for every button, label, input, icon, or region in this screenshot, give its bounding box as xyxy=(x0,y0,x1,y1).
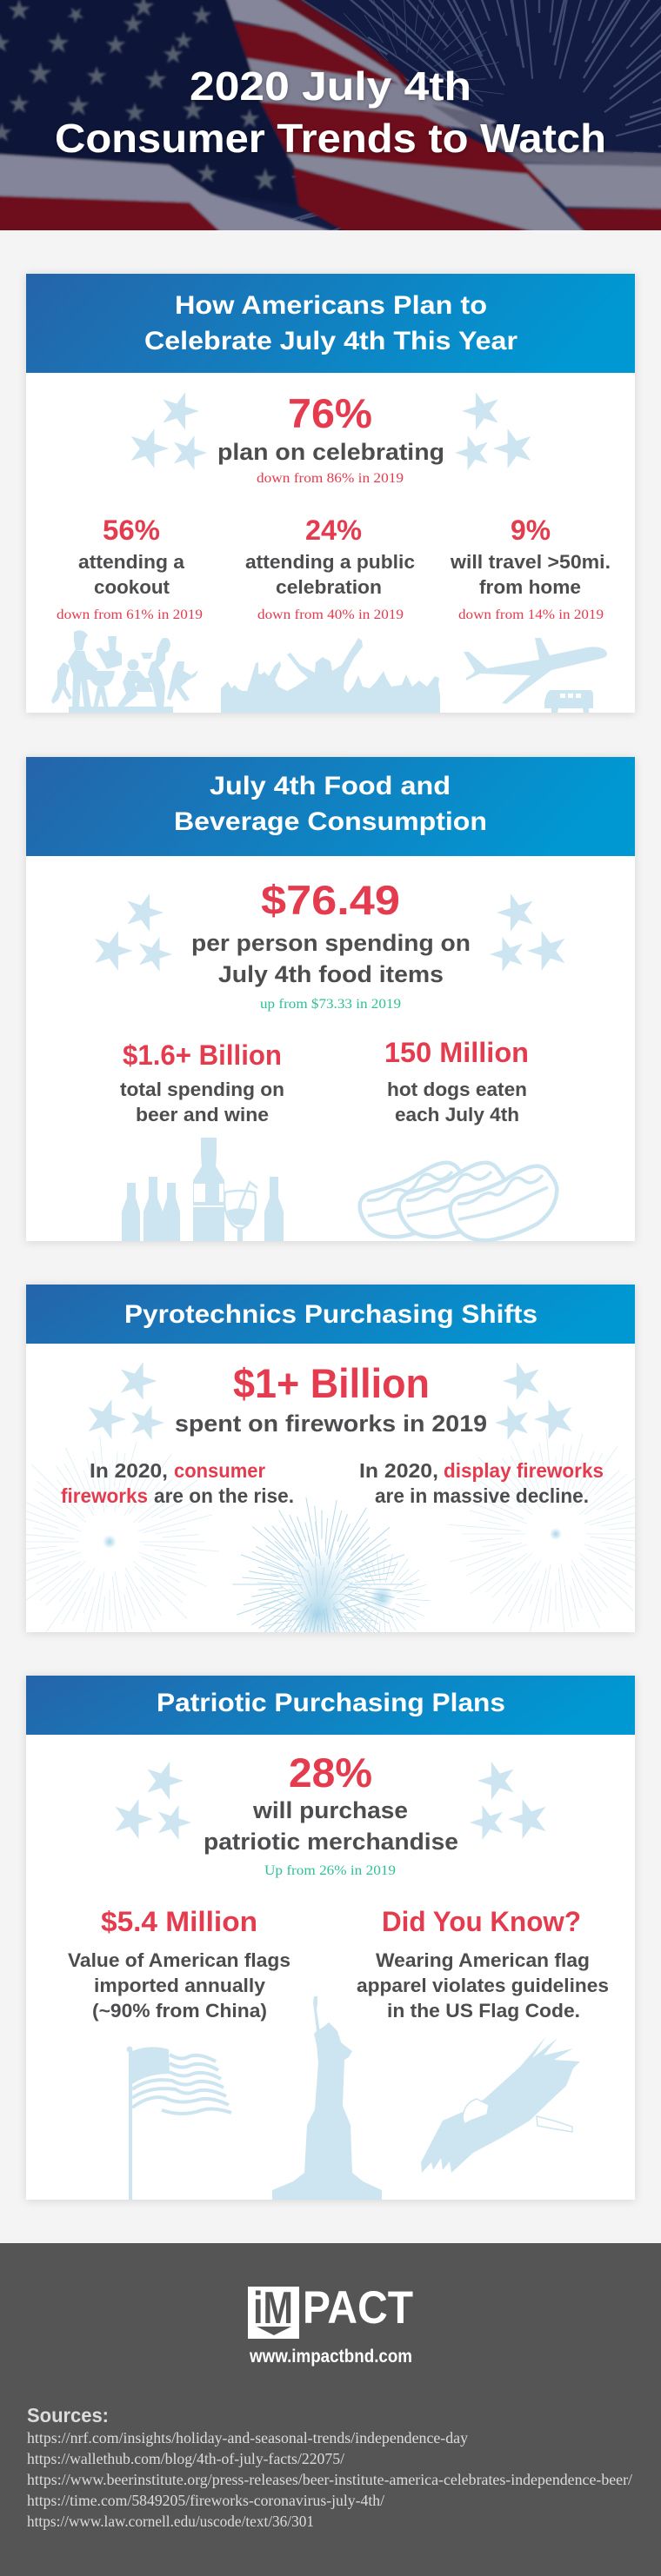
stat: hot dogs: 150 Million xyxy=(384,1037,529,1068)
sources heading: Sources: xyxy=(27,2404,109,2427)
text: display fireworks: are in massive decline. xyxy=(375,1484,589,1507)
panel card xyxy=(26,1676,635,2200)
stat: travel: down from 14% in 2019 xyxy=(458,607,604,622)
section header: How Americans Plan to xyxy=(175,291,487,320)
main stat: 76% xyxy=(217,390,444,486)
main stat: 76%: plan on celebrating xyxy=(217,439,444,465)
fact: did you know xyxy=(357,1906,609,2022)
decorative stars left xyxy=(88,887,176,973)
stat: public celebration: celebration xyxy=(276,576,382,598)
icon: bottles and glass xyxy=(122,1138,284,1241)
panel: patriotic purchasing xyxy=(26,1676,635,2200)
icon: Statue of Liberty xyxy=(272,1996,382,2200)
main stat: $1+ Billion: spent on fireworks in 2019 xyxy=(175,1411,487,1437)
stat: cookout: down from 61% in 2019 xyxy=(57,607,203,622)
main stat: 28%: Up from 26% in 2019 xyxy=(264,1863,396,1878)
stat: beer and wine: beer and wine xyxy=(136,1104,269,1125)
panel: how Americans plan to celebrate xyxy=(26,274,635,713)
panel card xyxy=(26,1285,635,1632)
panel card xyxy=(26,274,635,713)
panel card xyxy=(26,757,635,1241)
stat: cookout: cookout xyxy=(94,576,170,598)
icon: cookout silhouettes xyxy=(51,630,198,713)
title xyxy=(55,63,606,161)
stat: flag imports: imported annually xyxy=(94,1975,266,1996)
fact: did you know: apparel violates guidelines xyxy=(357,1975,609,1996)
main stat: 76%: down from 86% in 2019 xyxy=(257,471,404,486)
stat: beer and wine xyxy=(120,1039,284,1125)
decorative stars left xyxy=(124,386,210,472)
stat: hot dogs xyxy=(384,1037,529,1125)
logo: IMPACT xyxy=(248,2282,413,2339)
decorative stars left xyxy=(108,1756,195,1842)
decorative stars right xyxy=(451,386,538,472)
main stat: $76.49: up from $73.33 in 2019 xyxy=(260,997,401,1012)
section header: Patriotic Purchasing Plans xyxy=(157,1689,505,1717)
icon: bald eagle xyxy=(421,2036,580,2173)
sources list: https://www.beerinstitute.org/press-releases/beer-institute-america-celebrates-independence-beer/ xyxy=(27,2471,632,2488)
icon: American flag on pole xyxy=(127,2046,231,2200)
footer background xyxy=(0,2243,661,2576)
main stat: $76.49 xyxy=(191,877,471,1012)
stat: public celebration: attending a public xyxy=(245,551,415,573)
stat: cookout: 56% xyxy=(103,515,160,546)
main stat: $1+ Billion xyxy=(175,1360,487,1437)
fireworks illustration xyxy=(26,1427,635,1632)
stat: hot dogs: hot dogs eaten xyxy=(387,1079,527,1100)
section header xyxy=(26,757,635,856)
stat: cookout xyxy=(57,515,203,622)
main stat: $76.49: $76.49 xyxy=(261,877,400,923)
main stat: 28% xyxy=(204,1749,458,1878)
text: display fireworks: In 2020, xyxy=(359,1459,438,1482)
text: consumer fireworks: are on the rise. xyxy=(154,1484,294,1507)
main stat: 28%: 28% xyxy=(289,1749,372,1796)
main stat: 28%: patriotic merchandise xyxy=(204,1829,458,1855)
section header xyxy=(26,274,635,373)
icon: van xyxy=(544,690,593,713)
text: display fireworks xyxy=(359,1459,604,1507)
stat: public celebration xyxy=(245,515,415,622)
decorative stars right xyxy=(466,1756,553,1842)
section header xyxy=(26,1676,635,1735)
main stat: $76.49: July 4th food items xyxy=(218,961,444,987)
decorative stars right xyxy=(491,1356,579,1442)
stat: hot dogs: each July 4th xyxy=(395,1104,519,1125)
icon: hot dogs xyxy=(360,1163,557,1240)
stat: travel: will travel >50mi. xyxy=(450,551,611,573)
text: consumer fireworks: consumer xyxy=(174,1459,265,1482)
footer xyxy=(0,2243,661,2576)
icon: airplane xyxy=(464,638,607,704)
stat: travel xyxy=(450,515,611,622)
stat: flag imports: (~90% from China) xyxy=(92,2000,267,2022)
section header xyxy=(26,1285,635,1344)
website: www.impactbnd.com xyxy=(249,2347,412,2367)
stat: travel: from home xyxy=(479,576,581,598)
stat: flag imports xyxy=(68,1906,290,2022)
logo: IMPACT: PACT xyxy=(303,2282,413,2334)
main stat: $76.49: per person spending on xyxy=(191,930,471,956)
fact: did you know: Did You Know? xyxy=(382,1906,581,1937)
sources list xyxy=(27,2429,632,2530)
panel: pyrotechnics xyxy=(23,1283,638,1636)
stat: beer and wine: $1.6+ Billion xyxy=(123,1039,282,1071)
stat: flag imports: Value of American flags xyxy=(68,1949,290,1971)
stat: cookout: attending a xyxy=(78,551,185,573)
text: display fireworks: display fireworks xyxy=(444,1459,604,1482)
fact: did you know: in the US Flag Code. xyxy=(387,2000,580,2022)
section header: Celebrate July 4th This Year xyxy=(144,327,517,355)
main stat: 28%: will purchase xyxy=(252,1797,408,1823)
decorative stars right xyxy=(486,887,572,973)
sources list: https://wallethub.com/blog/4th-of-july-facts/22075/ xyxy=(27,2450,344,2467)
panel: food and beverage xyxy=(26,757,635,1241)
title: Consumer Trends to Watch xyxy=(55,116,606,161)
fact: did you know: Wearing American flag xyxy=(376,1949,590,1971)
section header: Pyrotechnics Purchasing Shifts xyxy=(124,1300,537,1329)
stat: public celebration: down from 40% in 2019 xyxy=(257,607,404,622)
text: consumer fireworks: In 2020, xyxy=(90,1459,168,1482)
text: consumer fireworks: fireworks xyxy=(61,1484,148,1507)
stat: flag imports: $5.4 Million xyxy=(101,1906,257,1937)
sources list: https://www.law.cornell.edu/uscode/text/36/301 xyxy=(27,2513,314,2530)
section header: Beverage Consumption xyxy=(174,807,487,836)
stat: beer and wine: total spending on xyxy=(120,1079,284,1100)
sources list: https://time.com/5849205/fireworks-coronavirus-july-4th/ xyxy=(27,2492,384,2509)
logo: IMPACT: iM xyxy=(253,2283,293,2334)
main stat: $1+ Billion: $1+ Billion xyxy=(233,1360,430,1406)
sources list: https://nrf.com/insights/holiday-and-seasonal-trends/independence-day xyxy=(27,2429,468,2447)
main stat: 76%: 76% xyxy=(288,390,372,436)
decorative stars left xyxy=(81,1356,168,1442)
section header: July 4th Food and xyxy=(210,772,451,800)
icon: cheering crowd xyxy=(221,638,440,713)
stat: public celebration: 24% xyxy=(305,515,362,546)
text: consumer fireworks xyxy=(61,1459,294,1507)
title: 2020 July 4th xyxy=(190,63,471,109)
hero banner: flag and fireworks xyxy=(0,0,661,230)
stat: travel: 9% xyxy=(511,515,551,546)
